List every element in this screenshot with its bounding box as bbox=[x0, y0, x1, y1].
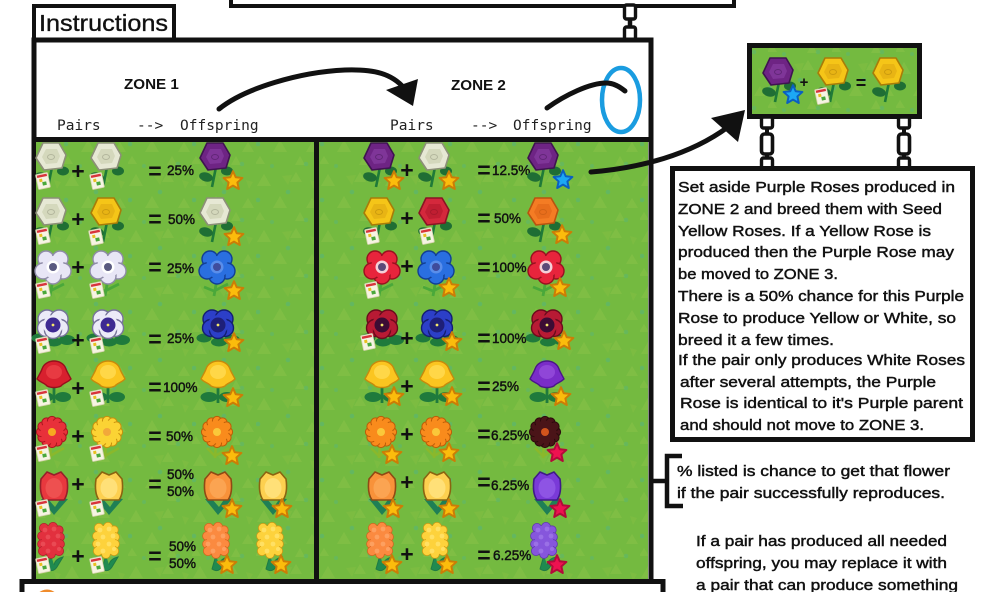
row: red anemone + blue anemone: 100% bbox=[492, 260, 527, 275]
row: white anemone + white anemone: 25% bbox=[167, 261, 194, 276]
row: red mum + yellow mum: 100% bbox=[163, 380, 198, 395]
row: purple rose + white rose: 12.5% bbox=[492, 163, 530, 178]
row: red pansy + blue pansy bbox=[360, 310, 573, 351]
text box: purple rose instructions: There is a 50% chance for this Purple bbox=[678, 288, 964, 305]
text box: purple rose instructions: Rose to produce Yellow or White, so bbox=[678, 310, 956, 327]
row: orange cosmos + orange cosmos: + bbox=[400, 421, 414, 447]
row: white anemone + white anemone: = bbox=[148, 254, 162, 280]
header: zone 1: --> bbox=[137, 118, 163, 134]
row: red hyacinth + yellow hyacinth: 50% bbox=[169, 539, 196, 554]
row: orange hyacinth + yellow hyacinth bbox=[367, 522, 566, 573]
row: red mum + yellow mum: = bbox=[148, 374, 162, 400]
heading tab: Instructions: Instructions bbox=[39, 10, 168, 36]
header: zone 2: Offspring bbox=[513, 118, 592, 134]
note: replacing pairs: If a pair has produced all needed bbox=[696, 533, 947, 550]
row: red mum + yellow mum: + bbox=[71, 375, 85, 401]
row: orange hyacinth + yellow hyacinth: + bbox=[400, 541, 414, 567]
row: red tulip + yellow tulip: = bbox=[148, 471, 162, 497]
row: white pansy + white pansy: + bbox=[71, 327, 85, 353]
row: red tulip + yellow tulip bbox=[36, 467, 291, 517]
row: red pansy + blue pansy: 100% bbox=[492, 331, 527, 346]
note: percent meaning: if the pair successfully reproduces. bbox=[677, 485, 945, 502]
text box: purple rose instructions: Set aside Purple Roses produced in bbox=[678, 179, 955, 196]
text box: purple rose instructions: produced then the Purple Rose may bbox=[678, 244, 955, 261]
row: orange tulip + yellow tulip: = bbox=[477, 469, 491, 495]
row: purple rose + white rose: + bbox=[400, 157, 414, 183]
bracket connector bbox=[652, 456, 683, 506]
note: replacing pairs: offspring, you may replace it with bbox=[696, 555, 947, 572]
row: yellow rose + red rose: 50% bbox=[494, 211, 521, 226]
arrow: zone 1 to zone 2 bbox=[219, 70, 418, 109]
row: white rose + yellow rose: = bbox=[148, 206, 162, 232]
header: zone 2: ZONE 2 bbox=[451, 77, 506, 94]
header: zone 1: Offspring bbox=[180, 118, 259, 134]
row: red cosmos + yellow cosmos: 50% bbox=[166, 429, 193, 444]
main panel: zones bbox=[34, 40, 651, 582]
row: red anemone + blue anemone: = bbox=[477, 254, 491, 280]
row: red tulip + yellow tulip: 50% bbox=[167, 484, 194, 499]
example sign: purple rose + seed yellow rose = yellow rose bbox=[750, 46, 920, 116]
row: yellow mum + yellow mum: 25% bbox=[492, 379, 519, 394]
row: yellow mum + yellow mum bbox=[364, 361, 570, 405]
text box: purple rose instructions: be moved to ZONE 3. bbox=[678, 266, 838, 283]
row: white rose + white rose: 25% bbox=[167, 163, 194, 178]
row: red hyacinth + yellow hyacinth: + bbox=[71, 543, 85, 569]
heading tab: Instructions bbox=[34, 6, 174, 40]
zone 1 rows bbox=[32, 143, 291, 574]
top sign box (cropped) bbox=[231, 0, 734, 6]
row: orange tulip + yellow tulip: + bbox=[400, 469, 414, 495]
header: zone 2 bbox=[390, 77, 592, 134]
row: red anemone + blue anemone: + bbox=[400, 253, 414, 279]
row: red tulip + yellow tulip: + bbox=[71, 471, 85, 497]
row: white pansy + white pansy bbox=[32, 310, 243, 354]
row: orange cosmos + orange cosmos bbox=[365, 416, 566, 463]
row: red hyacinth + yellow hyacinth: = bbox=[148, 543, 162, 569]
row: red cosmos + yellow cosmos: = bbox=[148, 423, 162, 449]
text box: purple rose instructions: ZONE 2 and breed them with Seed bbox=[678, 201, 942, 218]
row: white rose + yellow rose: 50% bbox=[168, 212, 195, 227]
text box: purple rose instructions: breed it a few times. bbox=[678, 332, 834, 349]
header: zone 2: --> bbox=[471, 118, 497, 134]
row: white anemone + white anemone bbox=[35, 251, 243, 299]
row: white rose + yellow rose: + bbox=[71, 206, 85, 232]
header: zone 2: Pairs bbox=[390, 118, 434, 134]
example sign: purple rose + seed yellow rose = yellow rose: + bbox=[800, 74, 809, 91]
bottom panel (cropped) bbox=[22, 582, 663, 592]
text box: purple rose instructions bbox=[672, 168, 972, 440]
row: white rose + white rose: = bbox=[148, 158, 162, 184]
row: red hyacinth + yellow hyacinth bbox=[36, 522, 290, 574]
row: white rose + white rose bbox=[34, 143, 242, 190]
row: red pansy + blue pansy: = bbox=[477, 325, 491, 351]
header: zone 1: ZONE 1 bbox=[124, 76, 179, 93]
row: orange tulip + yellow tulip: 6.25% bbox=[491, 478, 529, 493]
row: orange cosmos + orange cosmos: 6.25% bbox=[491, 428, 529, 443]
header: zone 1 bbox=[57, 76, 259, 134]
row: white rose + white rose: + bbox=[71, 158, 85, 184]
row: red pansy + blue pansy: + bbox=[400, 325, 414, 351]
row: red mum + yellow mum bbox=[36, 361, 242, 407]
arrow: zone 2 purple rose to example sign bbox=[591, 110, 745, 172]
row: white pansy + white pansy: = bbox=[148, 326, 162, 352]
row: red cosmos + yellow cosmos bbox=[36, 416, 241, 464]
row: yellow mum + yellow mum: = bbox=[477, 373, 491, 399]
text box: purple rose instructions: Rose is identical to it's Purple parent bbox=[680, 395, 964, 412]
arrow: into highlight oval bbox=[547, 83, 625, 108]
chains: example sign to text box bbox=[762, 117, 910, 172]
row: white anemone + white anemone: + bbox=[71, 254, 85, 280]
note: percent meaning bbox=[677, 463, 950, 502]
note: replacing pairs bbox=[696, 533, 958, 592]
row: white rose + yellow rose bbox=[34, 198, 243, 246]
row: purple rose + white rose: = bbox=[477, 157, 491, 183]
row: yellow rose + red rose bbox=[362, 198, 571, 245]
zone 2 rows bbox=[360, 143, 573, 573]
text box: purple rose instructions: Yellow Roses. If a Yellow Rose is bbox=[678, 223, 931, 240]
row: red anemone + blue anemone bbox=[364, 251, 569, 299]
row: orange cosmos + orange cosmos: = bbox=[477, 421, 491, 447]
row: red cosmos + yellow cosmos: + bbox=[71, 423, 85, 449]
row: white pansy + white pansy: 25% bbox=[167, 331, 194, 346]
row: purple rose + white rose bbox=[362, 143, 572, 189]
row: red tulip + yellow tulip: 50% bbox=[167, 467, 194, 482]
example sign: purple rose + seed yellow rose = yellow rose: = bbox=[856, 73, 866, 93]
row: yellow mum + yellow mum: + bbox=[400, 373, 414, 399]
text box: purple rose instructions: If the pair only produces White Roses bbox=[678, 352, 965, 369]
row: red hyacinth + yellow hyacinth: 50% bbox=[169, 556, 196, 571]
row: orange hyacinth + yellow hyacinth: 6.25% bbox=[493, 548, 531, 563]
row: orange hyacinth + yellow hyacinth: = bbox=[477, 542, 491, 568]
header: zone 1: Pairs bbox=[57, 118, 101, 134]
highlight oval bbox=[602, 68, 640, 132]
row: orange tulip + yellow tulip bbox=[368, 469, 569, 517]
chain: top to main panel bbox=[624, 5, 636, 41]
text box: purple rose instructions: after several attempts, the Purple bbox=[680, 374, 936, 391]
text box: purple rose instructions: and should not move to ZONE 3. bbox=[680, 417, 924, 434]
note: percent meaning: % listed is chance to get that flower bbox=[677, 463, 950, 480]
row: yellow rose + red rose: = bbox=[477, 205, 491, 231]
row: yellow rose + red rose: + bbox=[400, 205, 414, 231]
